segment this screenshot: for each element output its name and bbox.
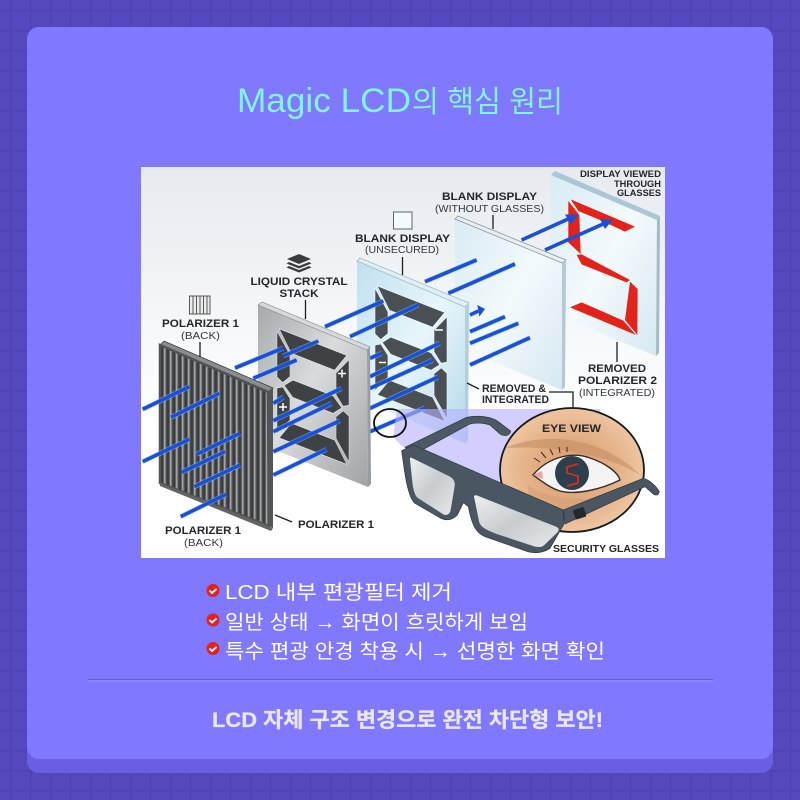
label: polarizer 1 back top: POLARIZER 1 <box>162 318 239 330</box>
red segmented S <box>568 199 638 335</box>
label: polarizer 1 back top: (BACK) <box>181 331 220 342</box>
plus marks <box>279 370 346 411</box>
label: liquid crystal stack: LIQUID CRYSTAL <box>250 276 348 288</box>
label: display viewed through glasses: GLASSES <box>617 188 661 199</box>
bullet list <box>206 581 605 663</box>
bullet 2: 일반 상태 → 화면이 흐릿하게 보임 <box>225 611 528 634</box>
beams: unsecured display to blank display <box>425 260 530 365</box>
panel: liquid crystal stack <box>258 302 371 487</box>
label: removed and integrated: REMOVED & <box>482 383 546 395</box>
front temple <box>563 478 659 524</box>
frame <box>402 445 564 553</box>
label: liquid crystal stack <box>250 254 348 319</box>
bottom callout: LCD 자체 구조 변경으로 완전 차단형 보안! <box>212 709 603 732</box>
label: polarizer 1 back bottom <box>165 525 241 549</box>
icon: polarizer <box>190 296 210 314</box>
label: removed and integrated: INTEGRATED <box>482 394 549 406</box>
eye view <box>500 408 644 532</box>
title: 의 핵심 원리 <box>412 86 563 119</box>
panel: display viewed through glasses <box>551 171 660 356</box>
beams: polarizer to liquid crystal <box>235 341 342 475</box>
title <box>237 82 563 120</box>
magnifier circle <box>374 409 406 437</box>
label: polarizer 1 back top <box>162 296 239 357</box>
bullet 3: 특수 편광 안경 착용 시 → 선명한 화면 확인 <box>225 640 605 663</box>
seven segment digit <box>277 328 349 465</box>
minus marks <box>379 330 443 362</box>
beams: blank display to S display <box>522 214 613 250</box>
eye view label: EYE VIEW <box>542 423 602 435</box>
label: polarizer 1 back bottom: (BACK) <box>184 538 223 549</box>
beams: liquid crystal to unsecured display <box>325 301 440 432</box>
label: liquid crystal stack: STACK <box>280 288 319 300</box>
label: blank display without glasses: BLANK DISPLAY <box>442 191 538 203</box>
icon: blank square <box>394 212 412 229</box>
label: display viewed through glasses <box>580 169 661 199</box>
label: blank display unsecured <box>355 212 451 275</box>
label: security glasses: SECURITY GLASSES <box>553 544 659 555</box>
divider <box>88 679 713 682</box>
security glasses <box>402 416 659 553</box>
panel: polarizer <box>160 341 273 531</box>
label: removed polarizer 2: (INTEGRATED) <box>579 388 655 399</box>
title: Magic LCD <box>237 82 411 120</box>
label: removed and integrated <box>467 383 573 408</box>
label: display viewed through glasses: THROUGH <box>614 179 661 190</box>
left lens <box>410 458 455 515</box>
label: display viewed through glasses: DISPLAY VIEWED <box>580 169 661 180</box>
diagram panel <box>141 167 665 558</box>
icon: layers <box>286 254 312 272</box>
seven segment digit <box>375 285 447 422</box>
tear duct <box>533 471 543 479</box>
label: removed polarizer 2: REMOVED <box>588 363 646 375</box>
beams: in front of polarizer <box>143 387 240 517</box>
bullet 1: LCD 내부 편광필터 제거 <box>225 581 452 604</box>
eye <box>533 455 620 492</box>
lavender view beam <box>393 409 600 510</box>
panel: blank display <box>455 216 566 390</box>
label: blank display without glasses: (WITHOUT GLASSES) <box>435 204 544 215</box>
label: polarizer 1 right <box>275 515 374 531</box>
rear temple <box>405 416 511 454</box>
label: blank display unsecured: BLANK DISPLAY <box>355 233 451 245</box>
label: blank display unsecured: (UNSECURED) <box>365 245 439 256</box>
panel: blank display unsecured <box>357 258 469 443</box>
label: polarizer 1 back bottom: POLARIZER 1 <box>165 525 241 537</box>
label: polarizer 1 right: POLARIZER 1 <box>298 519 374 531</box>
right lens <box>474 495 559 547</box>
label: removed polarizer 2 <box>578 342 657 399</box>
label: blank display without glasses <box>435 191 544 229</box>
label: removed polarizer 2: POLARIZER 2 <box>578 375 657 387</box>
